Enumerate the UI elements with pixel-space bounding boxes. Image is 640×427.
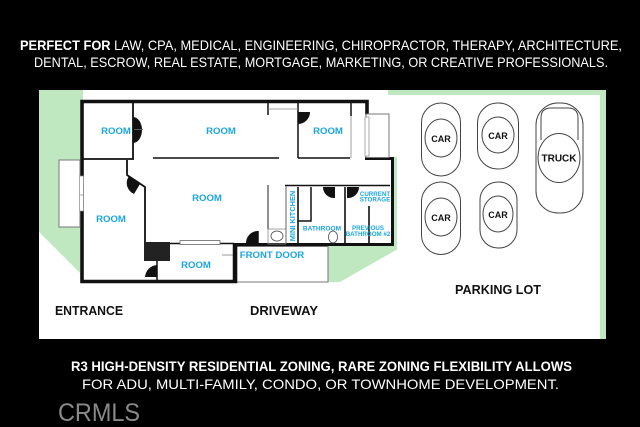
room labels: BATHROOM #2 xyxy=(346,231,391,238)
room labels: ROOM xyxy=(96,214,126,225)
fixtures xyxy=(134,130,338,255)
room labels: ROOM xyxy=(206,126,236,137)
room labels: PREVIOUS xyxy=(352,225,384,232)
room labels xyxy=(96,126,391,271)
icon: truck xyxy=(536,103,583,213)
icon: car 3: CAR xyxy=(431,213,451,223)
icon: truck: TRUCK xyxy=(542,154,577,164)
icon: car 1 xyxy=(422,103,460,176)
area labels: ENTRANCE xyxy=(55,303,123,318)
area labels xyxy=(55,282,541,318)
room labels: ROOM xyxy=(181,260,211,271)
icon: car 3 xyxy=(422,182,460,254)
door swings xyxy=(127,112,359,277)
panel: entrance bay window xyxy=(59,160,84,227)
dark utility block xyxy=(144,242,170,261)
footer text xyxy=(71,358,572,392)
area labels: PARKING LOT xyxy=(455,282,541,297)
icon: car 4: CAR xyxy=(488,210,508,220)
area labels: DRIVEWAY xyxy=(250,303,318,318)
room labels: ROOM xyxy=(101,126,131,137)
room labels: CURRENT xyxy=(360,191,390,198)
panel: right bay window xyxy=(365,114,389,158)
floor plan walls xyxy=(82,102,392,282)
panel: site plan background xyxy=(39,90,606,339)
icon: car 2 xyxy=(478,103,518,169)
room labels: BATHROOM xyxy=(303,226,342,232)
footer text: R3 HIGH-DENSITY RESIDENTIAL ZONING, RARE ZONING FLEXIBILITY ALLOWS xyxy=(71,358,572,374)
panel: front door porch xyxy=(236,246,328,282)
window between rooms xyxy=(180,240,220,244)
room labels: ROOM xyxy=(313,126,343,137)
room labels: ROOM xyxy=(192,193,222,204)
watermark: CRMLS xyxy=(58,399,140,427)
icon: car 1: CAR xyxy=(431,134,451,144)
heading xyxy=(20,37,622,70)
room labels: MINI KITCHEN xyxy=(288,191,297,241)
footer text: FOR ADU, MULTI-FAMILY, CONDO, OR TOWNHOME DEVELOPMENT. xyxy=(82,376,559,392)
icon: car 4 xyxy=(480,182,517,248)
room labels: FRONT DOOR xyxy=(240,250,304,261)
room labels: STORAGE xyxy=(360,196,390,204)
icon: car 2: CAR xyxy=(488,131,508,141)
